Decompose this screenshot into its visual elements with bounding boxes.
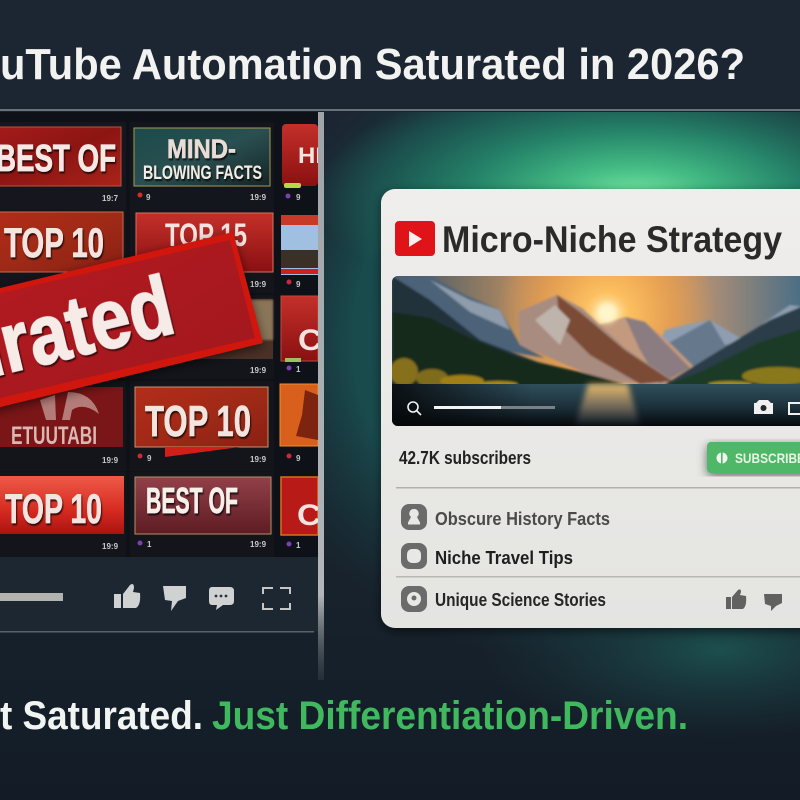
video controls bar <box>0 557 318 632</box>
row 1 thumbnails: HI <box>298 143 322 168</box>
panel: saturated YouTube grid <box>0 112 322 632</box>
icon: screen <box>789 403 800 414</box>
row 3 thumbnails <box>198 296 318 373</box>
row 5 thumbnails: BEST OF <box>146 480 238 521</box>
row 2 thumbnails: TOP 15 <box>165 217 247 253</box>
list item: Unique Science Stories <box>401 586 606 612</box>
distant right mountains <box>640 305 800 386</box>
row 2 thumbnails: TOP 10 <box>4 219 104 266</box>
icon: fullscreen <box>263 588 290 609</box>
row 4 thumbnails <box>0 384 318 463</box>
row 2 thumbnails: 19:9 <box>250 280 267 289</box>
photo progress bar <box>434 406 555 409</box>
row 5 thumbnails: 1 <box>296 541 301 550</box>
row 5 thumbnails: 19:9 <box>102 542 119 551</box>
right forest <box>665 302 800 386</box>
progress bar <box>0 593 63 601</box>
row 5 thumbnails: C <box>297 499 321 532</box>
row 1 thumbnails: 19:9 <box>250 193 267 202</box>
sunlit middle peaks <box>598 317 695 384</box>
row 4 thumbnails: ETUUTABI <box>11 422 97 450</box>
panel divider <box>318 112 324 680</box>
row 2 thumbnails: 9 <box>296 280 301 289</box>
icon: search <box>408 402 421 415</box>
row 1 thumbnails <box>0 124 318 201</box>
subscriber count: 42.7K subscribers <box>399 448 531 468</box>
row 1 thumbnails: MIND- <box>167 134 236 164</box>
row 5 thumbnails: TOP 10 <box>5 485 102 532</box>
central peak <box>518 295 672 384</box>
row 4 thumbnails: 9 <box>296 454 301 463</box>
row 1 thumbnails: 9 <box>296 193 301 202</box>
row 5 thumbnails <box>0 476 318 549</box>
row 1 thumbnails: 19:7 <box>102 194 119 203</box>
icon: card thumbs down <box>764 594 782 611</box>
row 1 thumbnails: 9 <box>146 193 151 202</box>
photo controls <box>408 400 800 415</box>
row 1 thumbnails: BLOWING FACTS <box>143 163 262 184</box>
subscribe button <box>707 442 800 473</box>
landscape photo <box>390 276 800 426</box>
row 4 thumbnails: 9 <box>147 454 152 463</box>
left forest <box>392 312 625 392</box>
icon: YouTube logo <box>395 221 435 256</box>
panel: Micro-Niche Strategy card <box>381 189 800 628</box>
row 3 thumbnails: 1 <box>296 365 301 374</box>
row 4 thumbnails: TOP 10 <box>145 397 251 446</box>
left blue mountain <box>392 276 545 358</box>
bottom tagline <box>0 694 688 738</box>
icon: comment <box>209 587 234 610</box>
list item: Obscure History Facts: Obscure History Facts <box>435 509 610 529</box>
list item: Unique Science Stories: Unique Science Stories <box>435 590 606 610</box>
list item: Obscure History Facts <box>401 504 610 530</box>
list item: Niche Travel Tips <box>401 543 573 569</box>
icon: thumbs down <box>163 586 186 611</box>
thumbnail grid <box>0 122 322 557</box>
row 1 thumbnails: BEST OF <box>0 138 116 180</box>
row 3 thumbnails: 19:9 <box>250 366 267 375</box>
list item: Niche Travel Tips: Niche Travel Tips <box>435 548 573 568</box>
row 3 thumbnails: C <box>298 324 322 357</box>
icon: thumbs up <box>114 584 140 608</box>
tagline: green part: Just Differentiation-Driven. <box>212 694 688 738</box>
icon: camera <box>754 400 773 414</box>
row 4 thumbnails: 19:9 <box>102 456 119 465</box>
row 4 thumbnails: 19:9 <box>250 455 267 464</box>
title: visible text: uTube Automation Saturated in 2026? <box>0 40 745 89</box>
row 5 thumbnails: 19:9 <box>250 540 267 549</box>
icon: card thumbs up <box>726 589 746 609</box>
tagline: white part: t Saturated. <box>0 694 203 738</box>
row 5 thumbnails: 1 <box>147 540 152 549</box>
row 2 thumbnails <box>0 212 318 287</box>
